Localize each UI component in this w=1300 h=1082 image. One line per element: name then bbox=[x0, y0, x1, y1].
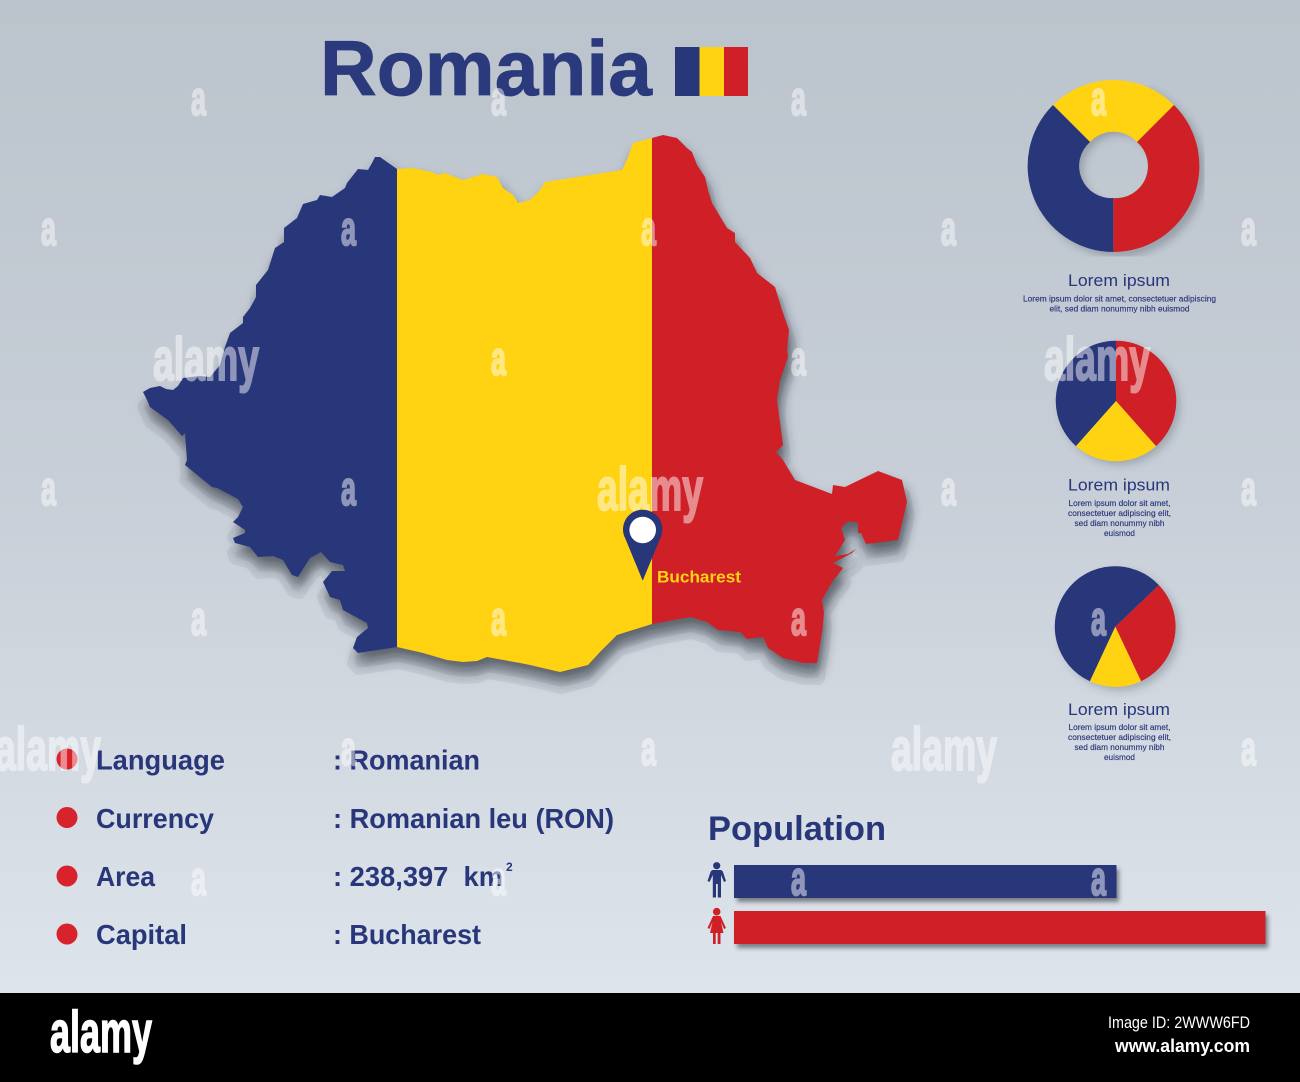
fact: currency: : Romanian leu (RON) bbox=[333, 803, 614, 834]
watermark overlay: a bbox=[641, 723, 656, 776]
panel: population bbox=[708, 810, 1268, 948]
watermark overlay: a bbox=[791, 593, 806, 646]
watermark overlay: alamy bbox=[891, 716, 997, 783]
panel: pie chart three and caption: Lorem ipsum dolor sit amet, bbox=[1068, 722, 1170, 732]
fact: capital: Capital bbox=[96, 919, 187, 950]
panel: pie chart two and caption: Lorem ipsum bbox=[1068, 476, 1170, 494]
bar: male population bbox=[734, 865, 1119, 902]
panel: pie chart two and caption: sed diam nonummy nibh bbox=[1074, 518, 1165, 528]
watermark overlay: alamy bbox=[0, 716, 101, 783]
panel: pie chart three and caption bbox=[1055, 566, 1180, 762]
watermark overlay: a bbox=[1241, 463, 1256, 516]
watermark overlay: a bbox=[1241, 203, 1256, 256]
watermark overlay: a bbox=[1091, 853, 1106, 906]
panel: pie chart three and caption: Lorem ipsum bbox=[1068, 700, 1170, 719]
panel: pie chart three and caption: sed diam nonummy nibh bbox=[1074, 742, 1165, 752]
icon: man bbox=[708, 862, 726, 898]
fact: area: 2 bbox=[506, 860, 513, 874]
watermark overlay: alamy bbox=[597, 456, 703, 523]
watermark overlay: a bbox=[641, 203, 656, 256]
panel: pie chart three and caption: consectetuer adipiscing elit, bbox=[1068, 732, 1171, 742]
panel: pie chart three and caption: euismod bbox=[1104, 752, 1135, 762]
watermark overlay: a bbox=[791, 853, 806, 906]
title: Romania bbox=[320, 24, 653, 112]
panel: pie chart two and caption bbox=[1056, 341, 1180, 538]
footer bar: alamy bbox=[50, 1000, 152, 1065]
watermark overlay: a bbox=[41, 463, 56, 516]
watermark overlay: a bbox=[1241, 723, 1256, 776]
fact: capital bbox=[56, 919, 481, 950]
icon: location pin bbox=[623, 510, 662, 581]
watermark overlay: a bbox=[341, 203, 356, 256]
panel: donut chart and caption bbox=[1023, 80, 1216, 314]
watermark overlay: a bbox=[941, 463, 956, 516]
watermark overlay: a bbox=[791, 333, 806, 386]
watermark overlay: a bbox=[191, 593, 206, 646]
watermark overlay bbox=[0, 73, 1256, 906]
heading: population: Population bbox=[708, 810, 886, 848]
label: Bucharest: Bucharest bbox=[657, 568, 742, 586]
footer bar: www.alamy.com bbox=[1114, 1036, 1250, 1056]
panel: donut chart and caption: Lorem ipsum dolor sit amet, consectetuer adipiscing bbox=[1023, 294, 1216, 304]
watermark overlay: a bbox=[1091, 593, 1106, 646]
panel: pie chart two and caption: consectetuer adipiscing elit, bbox=[1068, 508, 1171, 518]
watermark overlay: a bbox=[341, 723, 356, 776]
fact: area: Area bbox=[96, 861, 155, 892]
fact: area: : 238,397 km bbox=[333, 861, 503, 892]
watermark overlay: alamy bbox=[153, 326, 259, 393]
watermark overlay: a bbox=[191, 73, 206, 126]
fact: capital: : Bucharest bbox=[333, 919, 481, 950]
fact: currency: Currency bbox=[96, 803, 214, 834]
map of Romania in flag colours bbox=[130, 120, 922, 690]
watermark overlay: a bbox=[791, 73, 806, 126]
footer bar bbox=[0, 993, 1300, 1082]
watermark overlay: a bbox=[491, 73, 506, 126]
watermark overlay: a bbox=[1091, 73, 1106, 126]
panel: pie chart two and caption: Lorem ipsum dolor sit amet, bbox=[1068, 498, 1170, 508]
watermark overlay: a bbox=[191, 853, 206, 906]
fact: language: : Romanian bbox=[333, 744, 480, 776]
watermark overlay: a bbox=[41, 203, 56, 256]
watermark overlay: a bbox=[491, 333, 506, 386]
watermark overlay: a bbox=[941, 203, 956, 256]
fact: language: Language bbox=[96, 744, 225, 776]
footer bar: Image ID: 2WWW6FD bbox=[1108, 1013, 1250, 1032]
panel: pie chart two and caption: euismod bbox=[1104, 528, 1135, 538]
panel: donut chart and caption: elit, sed diam nonummy nibh euismod bbox=[1050, 304, 1190, 314]
panel: donut chart and caption: Lorem ipsum bbox=[1068, 271, 1170, 290]
panel: country facts bbox=[56, 744, 614, 950]
watermark overlay: alamy bbox=[1044, 326, 1150, 393]
icon: Romania flag bbox=[675, 47, 748, 96]
fact: language bbox=[56, 744, 480, 776]
watermark overlay: a bbox=[491, 853, 506, 906]
bar: female population bbox=[734, 911, 1268, 948]
watermark overlay: a bbox=[491, 593, 506, 646]
fact: currency bbox=[56, 803, 614, 834]
watermark overlay: a bbox=[341, 463, 356, 516]
fact: area bbox=[56, 860, 513, 892]
icon: woman bbox=[708, 908, 726, 944]
